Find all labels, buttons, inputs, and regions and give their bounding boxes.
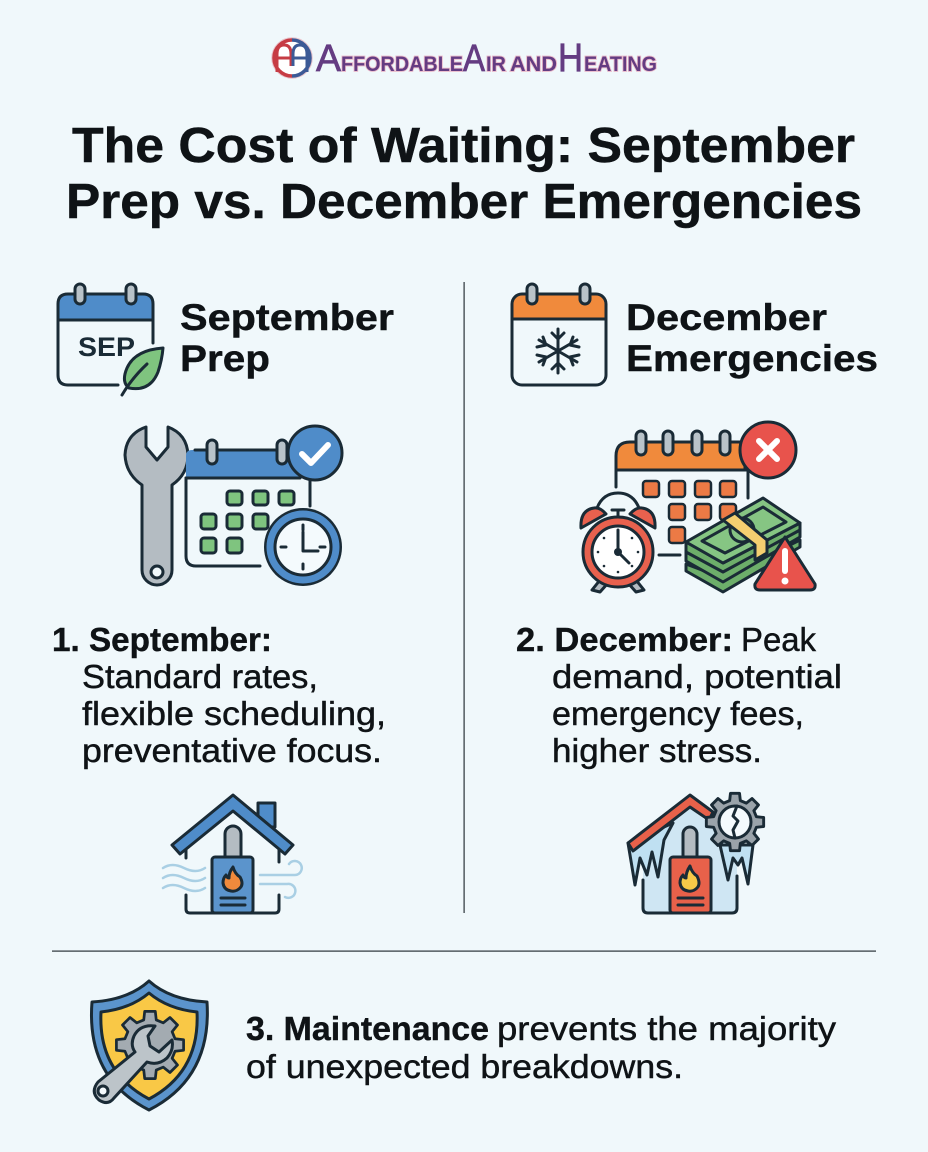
- panel: September prep: [52, 284, 394, 913]
- logo: Affordable Air and Heating: [272, 36, 657, 80]
- text block: September: 1. September:: [52, 621, 272, 658]
- icon: house with furnace and air flow: [163, 795, 302, 913]
- icon: September calendar with leaf: SEP: [78, 332, 135, 362]
- text block: September: Standard rates,: [82, 658, 318, 695]
- logo: Affordable Air and Heating: AND: [510, 53, 557, 76]
- divider: vertical: [464, 282, 465, 913]
- text block: maintenance: prevents the majority: [497, 1010, 837, 1047]
- heading: September Prep: [180, 297, 394, 379]
- panel: maintenance: [91, 981, 837, 1110]
- text block: December: emergency fees,: [552, 695, 804, 732]
- icon: December calendar with snowflake: [512, 284, 606, 385]
- text block: September: [52, 621, 386, 769]
- text block: maintenance: 3. Maintenance: [246, 1010, 489, 1047]
- text block: December: higher stress.: [552, 732, 762, 769]
- heading: September Prep: Prep: [180, 338, 270, 379]
- title: The Cost of Waiting: September: [72, 119, 855, 173]
- icon: wrench, calendar, check and clock: [125, 426, 342, 586]
- text block: December: [516, 621, 842, 769]
- heading: December Emergencies: December: [626, 297, 827, 338]
- divider: horizontal: [52, 950, 876, 952]
- heading: December Emergencies: [626, 297, 878, 379]
- text block: December: demand, potential: [552, 658, 842, 695]
- text block: December: 2. December:: [516, 621, 733, 658]
- logo: Affordable Air and Heating: IR: [486, 53, 506, 76]
- title: Prep vs. December Emergencies: [66, 175, 862, 229]
- text block: December: Peak: [741, 621, 816, 658]
- heading: September Prep: September: [180, 297, 394, 338]
- text block: maintenance: [246, 1010, 837, 1085]
- logo: Affordable Air and Heating: EATING: [584, 53, 657, 76]
- logo: Affordable Air and Heating: A: [316, 38, 342, 80]
- icon: shield with gear and wrench: [91, 981, 207, 1110]
- text block: maintenance: of unexpected breakdowns.: [246, 1048, 683, 1085]
- title: [66, 119, 862, 229]
- logo: Affordable Air and Heating: FFORDABLE: [341, 53, 463, 76]
- text block: September: flexible scheduling,: [82, 695, 386, 732]
- text block: September: preventative focus.: [82, 732, 382, 769]
- logo: Affordable Air and Heating: A: [463, 38, 486, 80]
- icon: calendar, alarm clock, cash and warning: [581, 422, 815, 592]
- heading: December Emergencies: Emergencies: [626, 338, 878, 379]
- icon: frozen house with broken gear: [628, 793, 764, 913]
- panel: December emergencies: [512, 284, 878, 913]
- logo: Affordable Air and Heating: H: [558, 36, 583, 80]
- icon: September calendar with leaf: [58, 284, 163, 395]
